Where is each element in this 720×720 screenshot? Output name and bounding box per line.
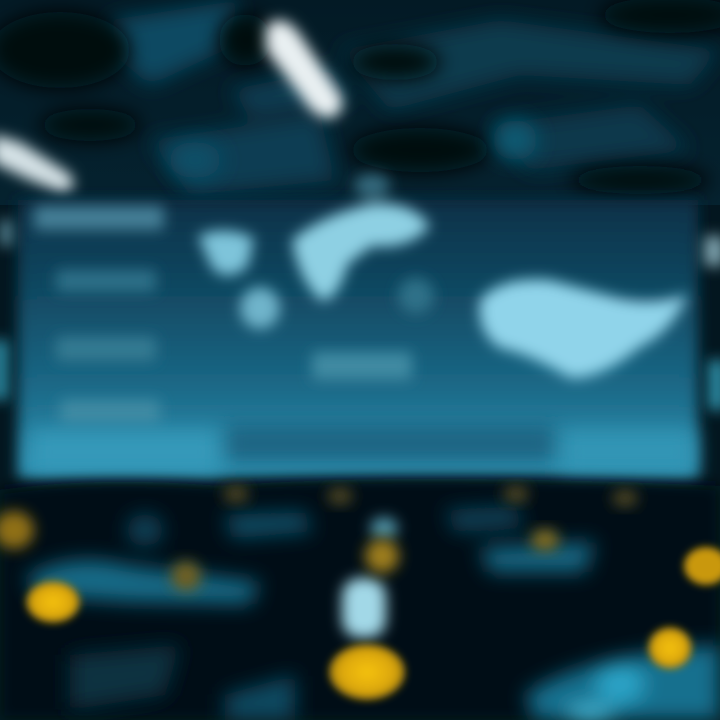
icon: large country map bbox=[479, 279, 688, 378]
skyline strip bbox=[30, 425, 695, 474]
white capsule left bbox=[0, 134, 73, 192]
bottom city band bbox=[0, 479, 720, 720]
white capsule top bbox=[266, 20, 342, 118]
top dark band with teal streaks bbox=[0, 0, 720, 205]
teal patches bbox=[25, 506, 720, 720]
left and right edge accents bbox=[0, 236, 720, 410]
center text block bbox=[312, 352, 412, 380]
left text list bbox=[0, 206, 164, 424]
icon: pale marker bbox=[342, 517, 398, 638]
panel: central map screen bbox=[0, 174, 698, 478]
icon: world map small bbox=[198, 174, 434, 329]
icon: yellow lights bbox=[0, 485, 720, 700]
